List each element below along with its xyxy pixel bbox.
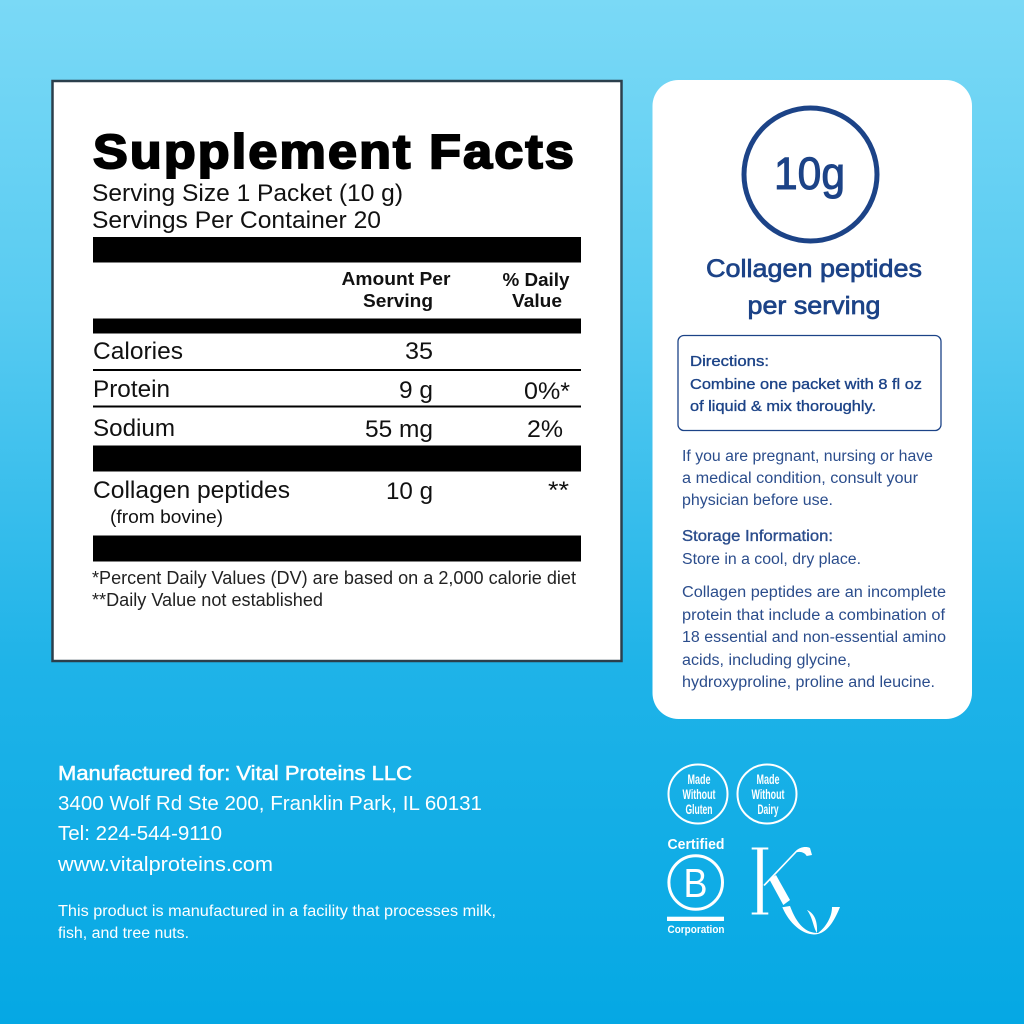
column header: amount per serving: Amount Per xyxy=(342,269,450,289)
heading: collagen peptides per serving xyxy=(706,255,922,320)
icon: made without gluten badge: Made xyxy=(688,771,711,787)
text block: medical warning: physician before use. xyxy=(682,492,833,509)
row: protein: 0%* xyxy=(524,378,570,405)
text block: amino acid description: acids, including glycine, xyxy=(682,652,851,669)
row: sodium: 55 mg xyxy=(365,416,433,443)
callout: directions: of liquid & mix thoroughly. xyxy=(690,398,876,415)
row: collagen peptides xyxy=(93,477,569,527)
icon: made without dairy badge: Made xyxy=(756,771,780,787)
row: calories: 35 xyxy=(405,338,433,365)
icon: certified B corporation: B xyxy=(684,860,708,906)
icon: 10g circle: 10g xyxy=(774,148,845,199)
icon: K logo xyxy=(752,847,840,934)
text block: medical warning: If you are pregnant, nursing or have xyxy=(682,448,933,465)
text block: storage information: Store in a cool, dry place. xyxy=(682,551,861,568)
icon: made without dairy badge xyxy=(738,764,796,824)
column header: percent daily value: % Daily xyxy=(502,270,570,290)
column header: percent daily value xyxy=(502,270,570,311)
heading: collagen peptides per serving: Collagen peptides xyxy=(706,255,922,283)
row: protein: 9 g xyxy=(399,377,433,404)
icon: certified B corporation: Corporation xyxy=(668,924,725,936)
icon: made without dairy badge: Dairy xyxy=(758,801,779,817)
text block: amino acid description xyxy=(682,584,946,691)
row: protein: Protein xyxy=(93,376,170,403)
icon: certified B corporation: Certified xyxy=(668,837,724,853)
text block: medical warning xyxy=(682,448,933,509)
row: sodium: Sodium xyxy=(93,415,175,442)
text block: storage information xyxy=(682,528,861,568)
text block: manufacturer contact xyxy=(57,763,482,876)
text block: amino acid description: hydroxyproline, proline and leucine. xyxy=(682,674,935,691)
row: collagen peptides: Collagen peptides xyxy=(93,477,290,504)
black bar: header rule xyxy=(93,318,581,334)
text block: allergen notice xyxy=(58,903,496,942)
row: collagen peptides: ** xyxy=(548,477,569,504)
row: calories: Calories xyxy=(93,338,183,365)
row: calories xyxy=(93,338,433,365)
serving information: Serving Size 1 Packet (10 g) xyxy=(92,180,403,207)
black bar: bottom xyxy=(93,536,581,562)
callout: directions: Combine one packet with 8 fl oz xyxy=(690,376,922,393)
text block: allergen notice: fish, and tree nuts. xyxy=(58,925,189,942)
row: collagen peptides: 10 g xyxy=(386,478,433,505)
text block: manufacturer contact: Tel: 224-544-9110 xyxy=(58,823,222,845)
heading: Supplement Facts: Supplement Facts xyxy=(93,126,576,179)
footnotes: **Daily Value not established xyxy=(92,590,323,610)
icon: made without gluten badge: Gluten xyxy=(686,801,712,817)
row: sodium xyxy=(93,415,563,443)
text block: amino acid description: Collagen peptides are an incomplete xyxy=(682,584,946,601)
icon: certified B corporation xyxy=(667,837,725,936)
footnotes xyxy=(92,568,576,610)
text block: storage information: Storage Information: xyxy=(682,528,833,545)
black bar: middle xyxy=(93,446,581,472)
text block: amino acid description: 18 essential and non-essential amino xyxy=(682,629,946,646)
footnotes: *Percent Daily Values (DV) are based on a 2,000 calorie diet xyxy=(92,568,576,588)
panel: supplement facts xyxy=(52,81,622,661)
row: sodium: 2% xyxy=(527,416,563,443)
column header: amount per serving xyxy=(342,269,450,311)
callout: directions: Directions: xyxy=(690,353,769,370)
heading: collagen peptides per serving: per serving xyxy=(748,292,880,320)
text block: medical warning: a medical condition, consult your xyxy=(682,470,918,487)
icon: made without gluten badge: Without xyxy=(682,786,716,802)
icon: made without dairy badge: Without xyxy=(752,786,785,802)
text block: manufacturer contact: Manufactured for: Vital Proteins LLC xyxy=(58,763,412,785)
icon: made without gluten badge xyxy=(668,764,728,824)
column header: percent daily value: Value xyxy=(512,291,562,311)
callout: directions xyxy=(678,336,941,430)
serving information: Servings Per Container 20 xyxy=(92,207,381,234)
text block: manufacturer contact: www.vitalproteins.com xyxy=(57,854,273,876)
panel: collagen information card xyxy=(652,80,972,719)
text block: manufacturer contact: 3400 Wolf Rd Ste 200, Franklin Park, IL 60131 xyxy=(58,793,482,815)
text block: amino acid description: protein that include a combination of xyxy=(682,607,946,624)
row: collagen peptides: (from bovine) xyxy=(110,507,223,527)
column header: amount per serving: Serving xyxy=(363,291,433,311)
text block: allergen notice: This product is manufactured in a facility that processes milk, xyxy=(58,903,496,920)
icon: 10g circle xyxy=(744,108,877,241)
black bar: top xyxy=(93,237,581,262)
row: protein xyxy=(93,376,570,405)
serving information xyxy=(92,180,403,234)
